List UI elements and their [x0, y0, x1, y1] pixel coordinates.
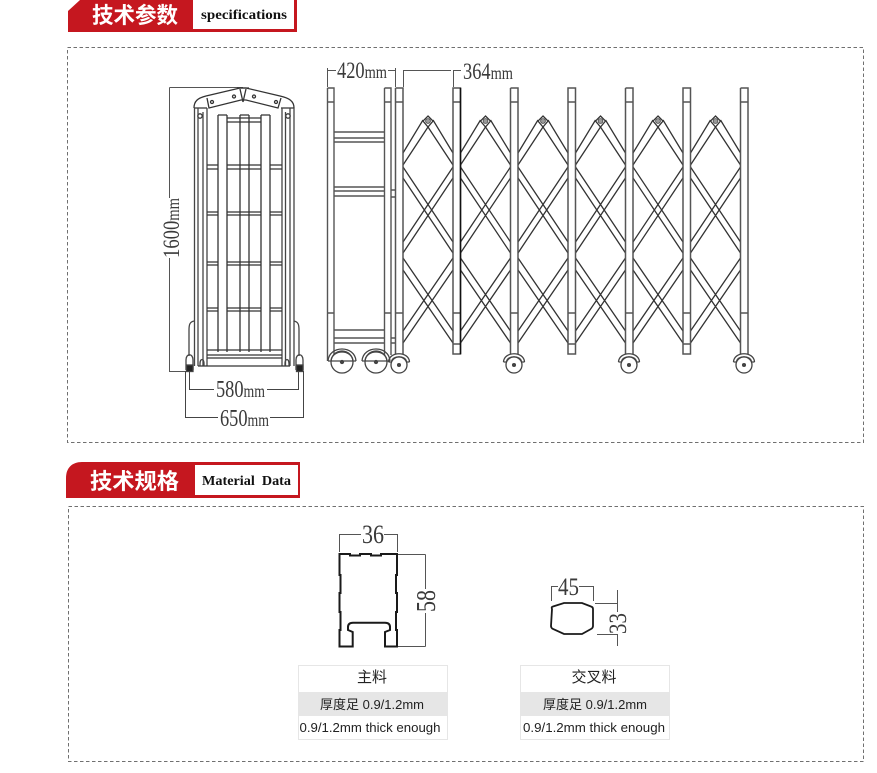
section header: 技术参数 specifications: 技术参数 [92, 3, 178, 28]
door rungs [198, 118, 290, 366]
door top cap [194, 88, 294, 118]
dimension: 420mm: 420mm [337, 58, 387, 83]
door side posts [194, 108, 294, 366]
door casters and side plates [186, 321, 303, 372]
dimension: 650mm [186, 371, 304, 432]
lattice scissor bays [403, 116, 740, 343]
dimension: 650mm: 650mm [220, 406, 269, 432]
profile outline [340, 554, 397, 646]
diagram: cross bar profile [551, 574, 632, 646]
diagram: side view folding gate [328, 58, 754, 373]
table: 交叉料: 交叉料 [571, 668, 617, 686]
dimension: 1600mm: 1600mm [159, 198, 184, 258]
dimension: 36: 36 [362, 520, 384, 549]
diagram: front view of door with dimensions [159, 88, 304, 432]
dimension: 58: 58 [411, 590, 441, 612]
section header: 技术规格 Material Data: Material Data [202, 474, 291, 489]
table: 交叉料 [520, 666, 670, 740]
gate wheels [328, 349, 754, 373]
dimension: 364mm [404, 59, 513, 87]
diagram: main profile cross section [340, 520, 441, 646]
dimension: 45: 45 [558, 574, 579, 601]
gate posts [396, 88, 748, 354]
dimension: 580mm [190, 371, 298, 403]
dimension: 1600mm [159, 88, 243, 372]
dimension: 364mm: 364mm [463, 59, 513, 84]
door inner bars [218, 115, 270, 352]
cross bar outline [551, 603, 593, 634]
section header: 技术规格 Material Data [66, 462, 300, 498]
panel: material data [68, 506, 864, 762]
panel: door dimensions [68, 48, 864, 442]
table: 主料: 主料 [357, 669, 387, 686]
table: 交叉料: 0.9/1.2mm thick enough [523, 720, 665, 735]
table: 主料 [298, 666, 448, 740]
table: 主料: 0.9/1.2mm thick enough [300, 720, 440, 735]
dimension: 580mm: 580mm [216, 377, 265, 403]
table: 交叉料: 厚度足 0.9/1.2mm [543, 697, 647, 712]
end frame [328, 88, 395, 361]
dimension: 33: 33 [605, 613, 632, 634]
section header: 技术参数 specifications [68, 0, 297, 32]
section header: 技术参数 specifications: specifications [201, 7, 287, 22]
section header: 技术规格 Material Data: 技术规格 [90, 469, 179, 494]
table: 主料: 厚度足 0.9/1.2mm [320, 697, 424, 712]
